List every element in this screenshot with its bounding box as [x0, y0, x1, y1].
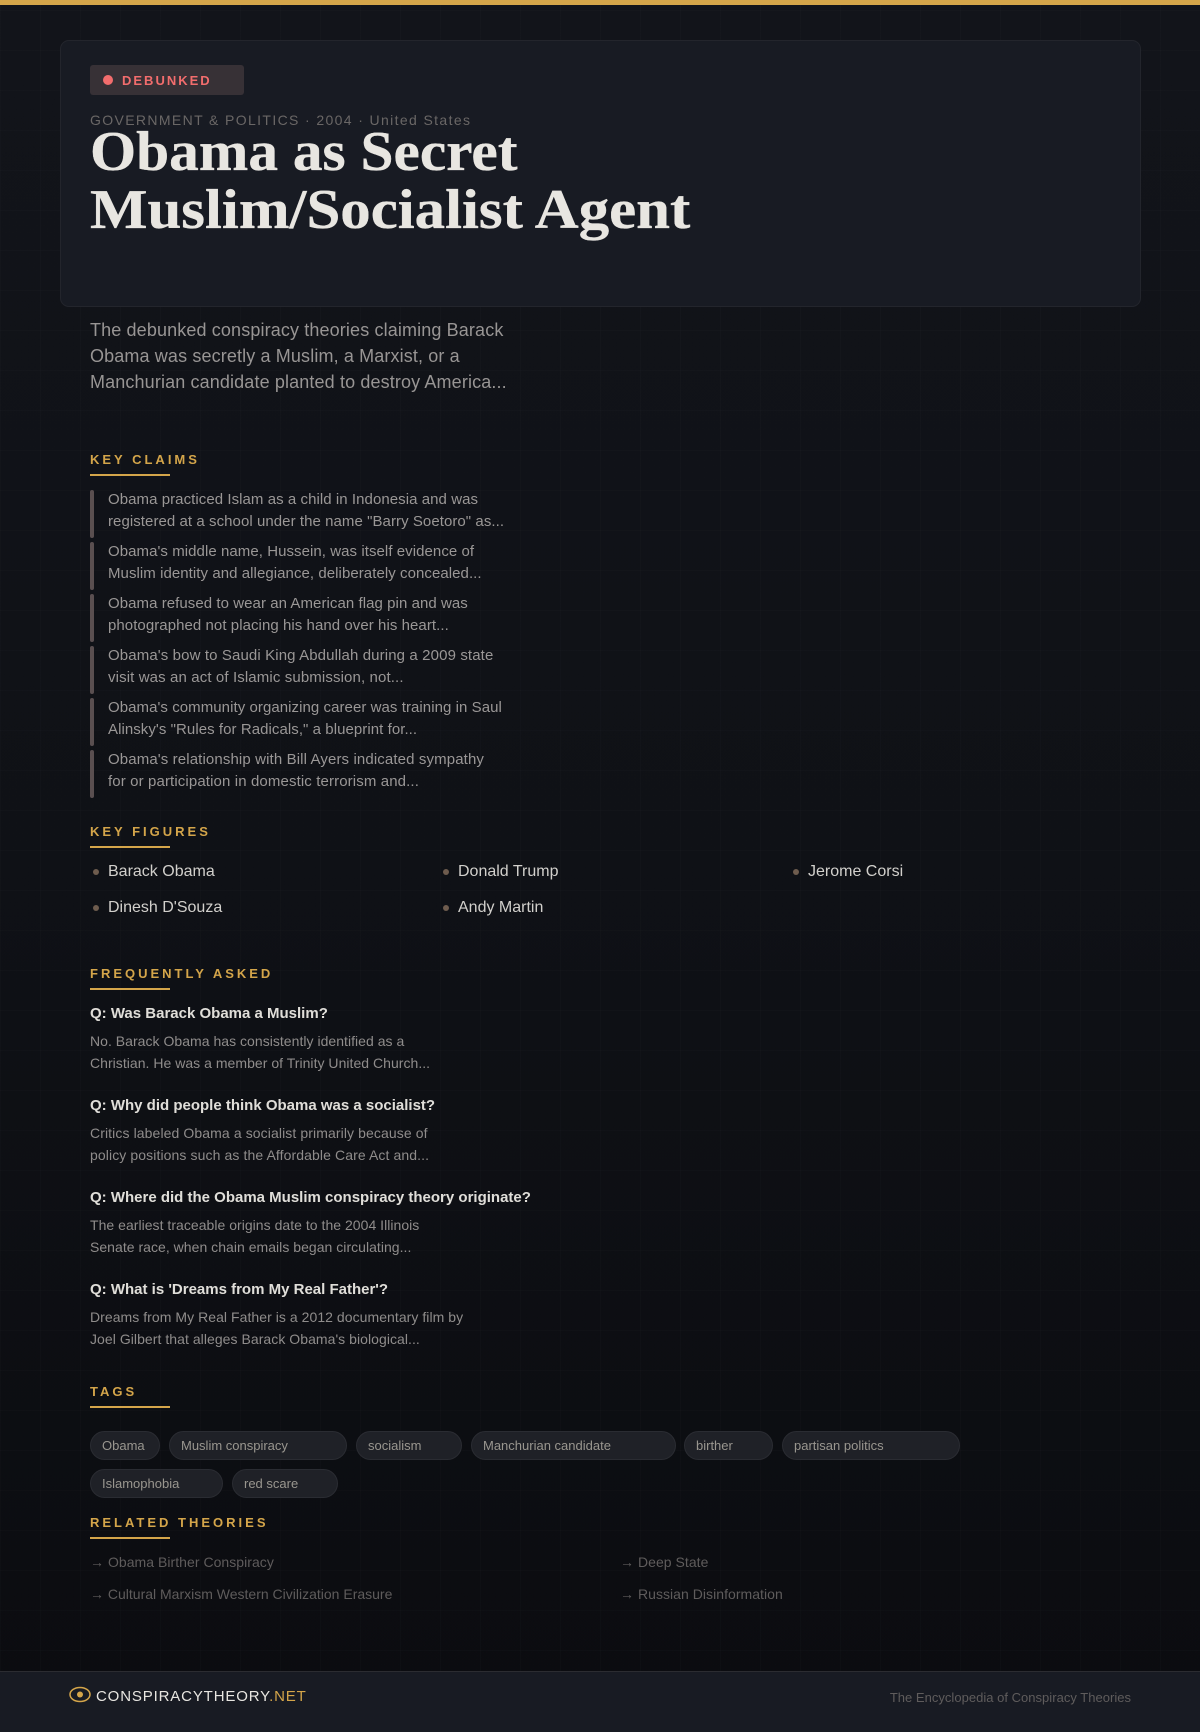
claim 5	[90, 698, 502, 746]
claim 6: for or participation in domestic terrorism and...	[108, 773, 419, 790]
tag: socialism	[356, 1431, 462, 1460]
faq 3: Q: Where did the Obama Muslim conspiracy theory originate?	[90, 1189, 531, 1206]
panel: key figures	[90, 824, 903, 916]
faq 1	[90, 1005, 430, 1071]
faq 1: No. Barack Obama has consistently identified as a	[90, 1033, 404, 1049]
heading: key figures: KEY FIGURES	[90, 824, 211, 839]
tag: red scare	[232, 1469, 338, 1498]
claim 5: Obama's community organizing career was training in Saul	[108, 699, 502, 716]
link: Obama Birther Conspiracy: → Obama Birther Conspiracy	[90, 1554, 274, 1570]
footer tagline: The Encyclopedia of Conspiracy Theories	[890, 1690, 1131, 1705]
description: The debunked conspiracy theories claiming Barack	[90, 320, 503, 340]
faq 1: Christian. He was a member of Trinity United Church...	[90, 1055, 430, 1071]
panel: related theories	[90, 1515, 783, 1602]
tag: Obama: Obama	[102, 1438, 145, 1453]
faq 2: policy positions such as the Affordable Care Act and...	[90, 1147, 429, 1163]
tag: socialism: socialism	[368, 1438, 421, 1453]
tag: Islamophobia: Islamophobia	[102, 1476, 179, 1491]
tag: partisan politics: partisan politics	[794, 1438, 884, 1453]
tag: Manchurian candidate: Manchurian candidate	[483, 1438, 611, 1453]
title: Obama as Secret	[90, 121, 518, 183]
figure: Dinesh D'Souza: Dinesh D'Souza	[108, 899, 222, 916]
footer logo text: CONSPIRACYTHEORY.NET	[96, 1688, 307, 1705]
tag: Obama	[90, 1431, 160, 1460]
faq 2: Critics labeled Obama a socialist primarily because of	[90, 1125, 428, 1141]
description: Obama was secretly a Muslim, a Marxist, or a	[90, 346, 460, 366]
figure: Donald Trump: Donald Trump	[458, 863, 558, 880]
claim 1: Obama practiced Islam as a child in Indonesia and was	[108, 491, 478, 508]
top accent bar	[0, 0, 1200, 5]
tag: birther	[684, 1431, 773, 1460]
faq 4: Q: What is 'Dreams from My Real Father'?	[90, 1281, 388, 1298]
panel: tags	[90, 1384, 960, 1498]
icon: eye logo	[69, 1686, 91, 1702]
claim 6	[90, 750, 484, 798]
faq 2: Q: Why did people think Obama was a socialist?	[90, 1097, 435, 1114]
panel: frequently asked	[90, 966, 531, 1347]
category meta line: GOVERNMENT & POLITICS · 2004 · United States	[90, 112, 471, 128]
tag: Muslim conspiracy	[169, 1431, 347, 1460]
figure: Andy Martin: Andy Martin	[458, 899, 543, 916]
faq 3	[90, 1189, 531, 1255]
faq 4: Dreams from My Real Father is a 2012 documentary film by	[90, 1309, 463, 1325]
tag: Muslim conspiracy: Muslim conspiracy	[181, 1438, 288, 1453]
link: Deep State: → Deep State	[620, 1554, 708, 1570]
title	[90, 121, 690, 241]
claim 2: Muslim identity and allegiance, deliberately concealed...	[108, 565, 482, 582]
faq 4	[90, 1281, 463, 1347]
claim 4	[90, 646, 493, 694]
badge label: DEBUNKED	[122, 73, 212, 88]
claim 1	[90, 490, 504, 538]
panel: key claims	[90, 452, 504, 798]
claim 3: Obama refused to wear an American flag pin and was	[108, 595, 468, 612]
tag: Islamophobia	[90, 1469, 223, 1498]
panel: header card	[60, 40, 1141, 307]
claim 6: Obama's relationship with Bill Ayers indicated sympathy	[108, 751, 484, 768]
heading: frequently asked: FREQUENTLY ASKED	[90, 966, 273, 981]
icon: status dot	[103, 75, 113, 85]
figure: Barack Obama: Barack Obama	[108, 863, 215, 880]
claim 1: registered at a school under the name "Barry Soetoro" as...	[108, 513, 504, 530]
tag: birther: birther	[696, 1438, 733, 1453]
faq 4: Joel Gilbert that alleges Barack Obama's biological...	[90, 1331, 420, 1347]
claim 2: Obama's middle name, Hussein, was itself evidence of	[108, 543, 474, 560]
claim 4: Obama's bow to Saudi King Abdullah during a 2009 state	[108, 647, 493, 664]
heading: tags: TAGS	[90, 1384, 137, 1399]
faq 3: The earliest traceable origins date to the 2004 Illinois	[90, 1217, 419, 1233]
tag: red scare: red scare	[244, 1476, 298, 1491]
faq 2	[90, 1097, 435, 1163]
description: Manchurian candidate planted to destroy America...	[90, 372, 507, 392]
heading: key claims: KEY CLAIMS	[90, 452, 200, 467]
claim 5: Alinsky's "Rules for Radicals," a blueprint for...	[108, 721, 417, 738]
link: Russian Disinformation: → Russian Disinformation	[620, 1586, 783, 1602]
description	[90, 320, 507, 392]
claim 2	[90, 542, 482, 590]
claim 3	[90, 594, 468, 642]
link: Cultural Marxism: → Cultural Marxism Western Civilization Erasure	[90, 1586, 392, 1602]
title: Muslim/Socialist Agent	[90, 178, 690, 240]
tag: Manchurian candidate	[471, 1431, 676, 1460]
claim 4: visit was an act of Islamic submission, not...	[108, 669, 404, 686]
heading: related theories: RELATED THEORIES	[90, 1515, 268, 1530]
tag: partisan politics	[782, 1431, 960, 1460]
faq 3: Senate race, when chain emails began circulating...	[90, 1239, 411, 1255]
badge: debunked	[90, 65, 244, 95]
claim 3: photographed not placing his hand over his heart...	[108, 617, 449, 634]
faq 1: Q: Was Barack Obama a Muslim?	[90, 1005, 328, 1022]
figure: Jerome Corsi: Jerome Corsi	[808, 863, 903, 880]
footer	[0, 1671, 1200, 1732]
